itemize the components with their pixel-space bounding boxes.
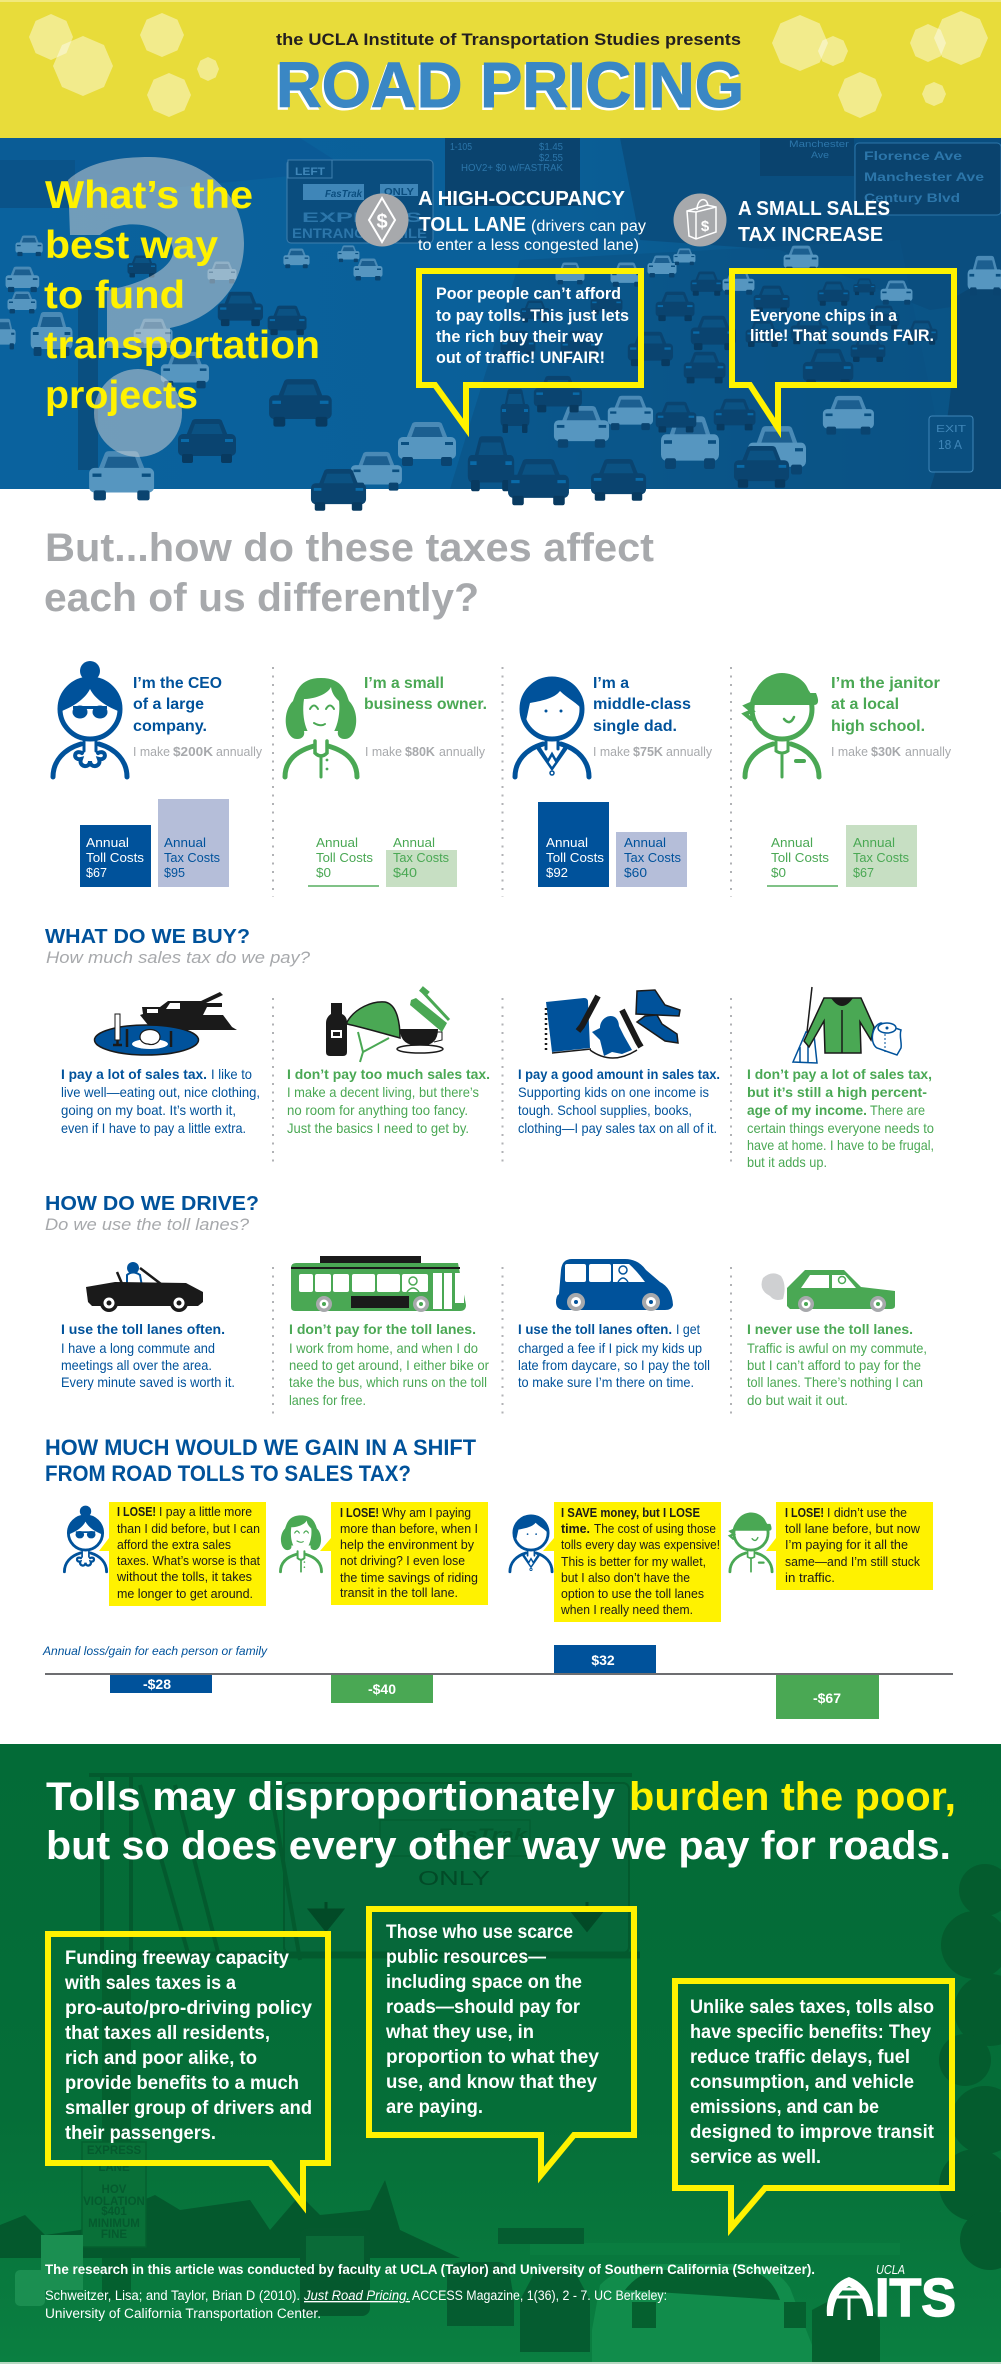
freeway sign: VIOLATION [83,2196,145,2208]
text: janitor purchases: but it’s still a high percent- [747,1084,927,1100]
text: owner driving: I don’t pay for the toll lanes. [289,1321,476,1337]
callout: funding freeway capacity: pro-auto/pro-driving policy [65,1998,312,2019]
icon: CEO [53,661,127,777]
heading: what do we buy: WHAT DO WE BUY? [45,926,250,948]
panel: single dad persona [515,675,713,887]
hero question heading: projects [45,374,198,417]
callout: scarce public resources: use, and know that they [386,2072,597,2093]
callout: scarce public resources: public resources— [386,1947,546,1968]
highway signs: FasTrak [325,189,362,200]
persona text: annually [216,745,263,759]
green headline: burden the poor, [629,1775,956,1819]
callout: funding freeway capacity: that taxes all residents, [65,2023,270,2044]
callout: dad saves: This is better for my wallet, [561,1554,706,1569]
text: owner purchases: I make a decent living, but there’s [287,1084,479,1100]
panel: green freeway photo [0,1744,1001,2364]
text: owner driving: I work from home, and when I do [289,1340,478,1356]
text: owner purchases: Just the basics I need to get by. [287,1120,469,1136]
bar chart: janitor costs: Annual [853,835,895,850]
bar chart: janitor costs [767,825,917,887]
icon: toll diamond [356,194,408,246]
bar chart: dad costs: Annual [624,835,666,850]
text: owner driving: take the bus, which runs on the toll [289,1374,487,1390]
callout: owner loses: transit in the toll lane. [340,1585,458,1600]
text: dad driving: I get [676,1321,700,1337]
option: high-occupancy toll lane [418,188,646,254]
icon: green bus [291,1256,466,1312]
yellow header band [0,0,1001,139]
chart: annual loss or gain: -$40 [368,1681,396,1697]
callout: benefits of tolls: service as well. [690,2147,821,2168]
callout: janitor loses: I didn’t use the [827,1505,907,1520]
freeway sign: LANE [98,2162,130,2174]
icon: shopping bag: $ [701,218,710,235]
callout: CEO loses: than I did before, but I can [117,1521,260,1536]
callout: dad saves: I SAVE money, but I LOSE [561,1505,700,1520]
highway signs: 1-105 [450,142,472,153]
callout: dad saves: The cost of using those [594,1521,716,1536]
text: CEO purchases [61,1066,260,1136]
freeway sign: HOV [102,2184,127,2196]
icon: janitor [745,673,819,777]
bar chart: CEO costs: Annual [86,835,129,850]
freeway sign [82,2142,146,2247]
chart: annual loss or gain: -$67 [813,1690,841,1706]
green headline [46,1775,956,1868]
option: small sales tax increase [738,198,890,246]
callout: toll lane opinion: Poor people can’t afford [436,285,621,303]
callout: CEO loses: taxes. What’s worse is that [117,1553,260,1568]
footer credits [45,2262,815,2321]
highway signs: Manchester [789,139,849,149]
chart: annual loss or gain [42,1644,953,1719]
heading: how do these taxes affect: But...how do these taxes affect [45,526,654,570]
persona text [831,675,952,759]
icon: yacht and dinner [94,992,237,1055]
callout: benefits of tolls: consumption, and vehicle [690,2072,914,2093]
panel: small business owner persona [285,675,487,887]
green headline: Tolls may disproportionately [46,1775,616,1819]
callout: benefits of tolls: Unlike sales taxes, tolls also [690,1997,934,2018]
bar chart: CEO costs: Annual [164,835,206,850]
highway signs: $1.45 [539,142,563,153]
hero question heading: to fund [44,274,185,317]
heading: how much would we gain: HOW MUCH WOULD WE GAIN IN A SHIFT [45,1435,477,1460]
callout: benefits of tolls: designed to improve transit [690,2122,935,2143]
freeway sign: MINIMUM [88,2218,140,2230]
bar chart: janitor costs: $67 [853,865,874,880]
callout: owner loses: not driving? I even lose [340,1553,465,1568]
text: janitor purchases: I don’t pay a lot of sales tax, [747,1066,932,1082]
persona text [364,675,487,759]
bar chart: CEO costs [80,799,229,887]
callout: sales tax opinion: Everyone chips in a [750,307,898,325]
text: janitor purchases: age of my income. [747,1102,867,1118]
column dividers [273,667,731,1418]
chart: annual loss or gain: $32 [591,1652,615,1668]
text: CEO purchases: going on my boat. It’s worth it, [61,1102,236,1118]
icon: school supplies and shoes [546,990,680,1058]
callout: janitor loses [766,1502,933,1590]
chart: annual loss or gain: -$28 [143,1676,171,1692]
callout: janitor loses: same—and I’m still stuck [785,1554,920,1569]
persona text: annually [439,745,486,759]
persona text: company. [133,718,207,735]
callout: CEO loses: I LOSE! [117,1504,156,1519]
icon: small CEO [64,1506,107,1572]
heading: what do we buy [45,926,311,967]
text: janitor purchases: but it adds up. [747,1154,827,1170]
logo: UCLA ITS: UCLA [876,2262,905,2277]
text: owner purchases [287,1066,490,1136]
text: janitor driving: do but wait it out. [747,1392,848,1408]
title: road pricing: ROAD PRICING [274,52,743,124]
persona text: I make [831,745,868,759]
callout: owner loses: help the environment by [340,1537,474,1552]
text: janitor driving: but I can’t afford to pay for the [747,1357,921,1373]
text: dad driving: charged a fee if I pick my kids up [518,1340,702,1356]
callout: CEO loses: without the tolls, it takes [116,1569,252,1584]
highway signs: $2.55 [539,153,563,164]
persona text: I’m the CEO [133,675,222,692]
persona text: I’m a small [364,675,444,692]
vehicles [15,2228,880,2362]
icon: toll diamond: $ [376,211,388,233]
text: dad driving: to make sure I’m there on time. [518,1374,694,1390]
footer credits: Schweitzer, Lisa; and Taylor, Brian D (2010). [45,2288,300,2303]
callout: benefits of tolls: emissions, and can be [690,2097,879,2118]
callout: CEO loses: me longer to get around. [117,1586,253,1601]
persona text [133,675,263,759]
callout: dad saves: but I also don’t have the [561,1570,690,1585]
callout: scarce public resources: proportion to what they [386,2047,599,2068]
heading: how do these taxes affect [44,526,654,620]
text: dad purchases: clothing—I pay sales tax on all of it. [518,1120,717,1136]
icon: small dad [510,1515,552,1572]
panel: janitor outcome [730,1502,933,1590]
icon: convertible [86,1262,203,1312]
hero question heading: transportation [44,324,320,367]
text: owner driving: lanes for free. [289,1392,366,1408]
trees and overpass [0,1864,1001,2270]
persona text: high school. [831,718,925,735]
text: dad purchases: Supporting kids on one income is [518,1084,709,1100]
highway signs: ENTRANCE 1 MILE [292,225,427,241]
callout: toll lane opinion [419,271,641,428]
title: road pricing: ROAD PRICING [276,49,744,121]
green headline: but so does every other way we pay for roads. [46,1824,951,1868]
logo: UCLA ITS [827,2262,956,2328]
freeway sign: $401 [101,2206,127,2218]
callout: scarce public resources [369,1909,634,2175]
persona text [593,675,713,759]
persona text: of a large [133,696,204,713]
callout: scarce public resources: are paying. [386,2097,483,2118]
callout: janitor loses: I LOSE! [785,1505,824,1520]
bar chart: janitor costs: Tax Costs [853,850,909,865]
highway signs [78,138,1001,472]
callout: sales tax opinion [732,271,954,428]
callout: toll lane opinion: out of traffic! UNFAIR! [436,349,605,367]
sign gantry: ONLY [418,1868,490,1890]
callout: funding freeway capacity: smaller group of drivers and [65,2098,312,2119]
callout: CEO loses: I pay a little more [159,1504,252,1519]
panel: CEO persona [53,661,263,887]
sign gantry [89,1775,640,2300]
text: owner purchases: I don’t pay too much sales tax. [287,1066,490,1082]
icon: shopping bag [674,194,726,246]
bar chart: CEO costs: Tax Costs [164,850,220,865]
callout: funding freeway capacity: rich and poor alike, to [65,2048,257,2069]
callout: sales tax opinion: little! That sounds FAIR. [750,327,934,345]
text: janitor driving: toll lanes. There’s nothing I can [747,1374,923,1390]
large question mark [68,157,244,457]
highway signs: Century Blvd [864,191,960,205]
bar chart: janitor costs: Toll Costs [771,850,830,865]
callout: owner loses: I LOSE! [340,1505,379,1520]
bar chart: janitor costs: Annual [771,835,813,850]
persona text: single dad. [593,718,677,735]
highway signs: Ave [811,150,829,160]
callout: scarce public resources: what they use, in [385,2022,534,2043]
text: janitor purchases: certain things everyone needs to [747,1120,934,1136]
icon: jacket, broom, paper towels [793,987,901,1063]
persona text: at a local [831,696,899,713]
callout: owner loses: more than before, when I [340,1521,478,1536]
text: owner driving [289,1321,489,1408]
heading: how do we drive: HOW DO WE DRIVE? [45,1193,259,1215]
text: owner purchases: no room for anything too fancy. [287,1102,468,1118]
persona text: I make [365,745,402,759]
traffic [0,235,1001,511]
icon: single dad [515,677,589,777]
option: high-occupancy toll lane: (drivers can pay [531,218,646,235]
bar chart: owner costs: Annual [393,835,435,850]
footer credits: Just Road Pricing. [303,2288,410,2303]
bar chart: dad costs: Toll Costs [546,850,605,865]
text: CEO driving [61,1321,235,1390]
icon: business owner [285,678,357,777]
persona text: $80K [405,745,435,759]
callout: janitor loses: I’m paying for it all the [785,1537,908,1552]
highway signs: EXIT [936,424,966,435]
callout: funding freeway capacity: provide benefits to a much [65,2073,299,2094]
callout: benefits of tolls: reduce traffic delays, fuel [690,2047,910,2068]
footer credits: ACCESS Magazine, 1(36), 2 - 7. UC Berkeley: [412,2288,667,2303]
heading: how much would we gain: FROM ROAD TOLLS TO SALES TAX? [45,1461,411,1486]
option: high-occupancy toll lane: A HIGH-OCCUPANCY [418,188,626,210]
callout: dad saves: time. [561,1521,590,1536]
decorative light hexagons [29,11,988,118]
hero question heading: best way [45,224,218,267]
highway signs: 18 A [938,437,962,452]
footer credits: University of California Transportation Center. [45,2306,321,2321]
callout: funding freeway capacity: Funding freeway capacity [65,1948,289,1969]
text: CEO driving: Every minute saved is worth it. [61,1374,235,1390]
callout: funding freeway capacity [48,1934,328,2205]
bar chart: CEO costs: Toll Costs [86,850,145,865]
presenter line: the UCLA Institute of Transportation Studies presents [276,30,741,49]
text: dad driving: I use the toll lanes often. [518,1321,672,1337]
bar chart: dad costs: Annual [546,835,588,850]
persona text: I make [133,745,170,759]
panel: owner outcome [280,1502,488,1605]
callout: benefits of tolls [675,1981,952,2228]
persona text: business owner. [364,696,487,713]
persona text: annually [905,745,952,759]
callout: janitor loses: toll lane before, but now [785,1521,921,1536]
bar chart: owner costs: Annual [316,835,358,850]
text: CEO purchases: live well—eating out, nice clothing, [61,1084,260,1100]
bar chart: dad costs [538,802,687,887]
highway signs: EXPRESS [302,209,422,225]
callout: scarce public resources: including space on the [386,1972,582,1993]
panel: CEO outcome [64,1502,266,1606]
callout: funding freeway capacity: their passengers. [65,2123,216,2144]
panel: hero traffic photo [0,138,1001,511]
text: dad driving [518,1321,710,1390]
bar chart: dad costs: $92 [546,865,568,880]
callout: janitor loses: in traffic. [785,1570,835,1585]
callout: CEO loses [99,1502,266,1606]
callout: dad saves: tolls every day was expensive! [561,1537,720,1552]
icon: green car with exhaust [762,1270,895,1312]
callout: toll lane opinion: the rich buy their way [436,328,604,346]
text: dad driving: late from daycare, so I pay the toll [518,1357,710,1373]
text: janitor purchases [747,1066,934,1170]
hero question heading: What’s the [45,174,253,217]
icon: small janitor [730,1512,772,1572]
panel: janitor persona [745,673,952,887]
text: dad purchases [518,1066,720,1136]
bar chart: CEO costs: $95 [164,865,185,880]
callout: CEO loses: afford the extra sales [117,1537,231,1552]
persona text: $75K [633,745,663,759]
callout: funding freeway capacity: with sales taxes is a [64,1973,236,1994]
persona text: I’m a [593,675,629,692]
bar chart: owner costs: Toll Costs [316,850,373,865]
bar chart: janitor costs: $0 [771,865,786,880]
callout: dad saves: option to use the toll lanes [561,1586,704,1601]
bar chart: owner costs: $0 [316,865,331,880]
callout: scarce public resources: roads—should pay for [386,1997,581,2018]
option: high-occupancy toll lane: TOLL LANE [419,214,526,236]
hero question heading [44,174,320,417]
heading: how do these taxes affect: each of us differently? [44,576,479,620]
persona text: middle-class [593,696,691,713]
highway signs: Florence Ave [864,149,962,163]
bar chart: dad costs: $60 [624,865,647,880]
callout: toll lane opinion: to pay tolls. This just lets [436,307,629,325]
bar chart: owner costs [308,835,457,887]
callout: owner loses [320,1502,488,1605]
text: CEO driving: I use the toll lanes often. [61,1321,225,1337]
heading: how do we drive: Do we use the toll lanes? [45,1215,250,1234]
option: small sales tax increase: TAX INCREASE [738,224,883,246]
callout: owner loses: Why am I paying [382,1505,471,1520]
highway signs: ONLY [384,187,414,198]
callout: dad saves: when I really need them. [560,1602,693,1617]
persona text: annually [666,745,713,759]
bar chart: dad costs: Tax Costs [624,850,681,865]
bar chart: CEO costs: $67 [86,865,107,880]
callout: benefits of tolls: have specific benefits: They [690,2022,931,2043]
option: high-occupancy toll lane: to enter a less congested lane) [418,237,639,254]
text: owner driving: need to get around, I either bike or [289,1357,489,1373]
text: dad purchases: I pay a good amount in sales tax. [518,1066,720,1082]
icon: blue minivan [556,1259,673,1311]
heading: how do we drive [45,1193,259,1234]
highway signs: Manchester Ave [864,170,984,184]
text: CEO driving: meetings all over the area. [61,1357,212,1373]
callout: scarce public resources: Those who use scarce [386,1922,573,1943]
callout: dad saves [543,1502,721,1622]
icon: bottle, helmet, cup, toothpaste [326,986,449,1062]
persona text: I make [593,745,630,759]
bar chart: owner costs: $40 [393,865,417,880]
logo: UCLA ITS: ITS [875,2268,956,2328]
text: janitor driving: I never use the toll lanes. [747,1321,913,1337]
freeway sign: FINE [101,2229,127,2241]
text: CEO purchases: even if I have to pay a little extra. [61,1120,246,1136]
option: small sales tax increase: A SMALL SALES [738,198,890,220]
panel: dad outcome [510,1502,721,1622]
text: dad purchases: tough. School supplies, books, [518,1102,692,1118]
text: CEO purchases: I like to [211,1066,252,1082]
text: janitor purchases: have at home. I have to be frugal, [747,1137,934,1153]
text: janitor driving [747,1321,927,1408]
text: janitor driving: Traffic is awful on my commute, [747,1340,927,1356]
text: CEO driving: I have a long commute and [61,1340,215,1356]
persona text: $30K [871,745,901,759]
persona text: $200K [173,745,213,759]
sign gantry: FasTrak [437,1825,529,1844]
highway signs: LEFT [295,166,325,178]
callout: owner loses: the time savings of riding [340,1570,478,1585]
footer credits: The research in this article was conducted by faculty at UCLA (Taylor) and University of Southern California (Schweitzer). [45,2262,815,2277]
icon: small owner [280,1515,322,1572]
persona text: I’m the janitor [831,675,940,692]
chart caption: Annual loss/gain for each person or family [42,1644,268,1658]
highway signs: HOV2+ $0 w/FASTRAK [461,163,563,174]
text: CEO purchases: I pay a lot of sales tax. [61,1066,207,1082]
bar chart: owner costs: Tax Costs [393,850,449,865]
text: janitor purchases: There are [870,1102,925,1118]
heading: what do we buy: How much sales tax do we pay? [46,948,311,967]
heading: how much would we gain [45,1435,477,1486]
freeway sign: EXPRESS [87,2145,141,2157]
